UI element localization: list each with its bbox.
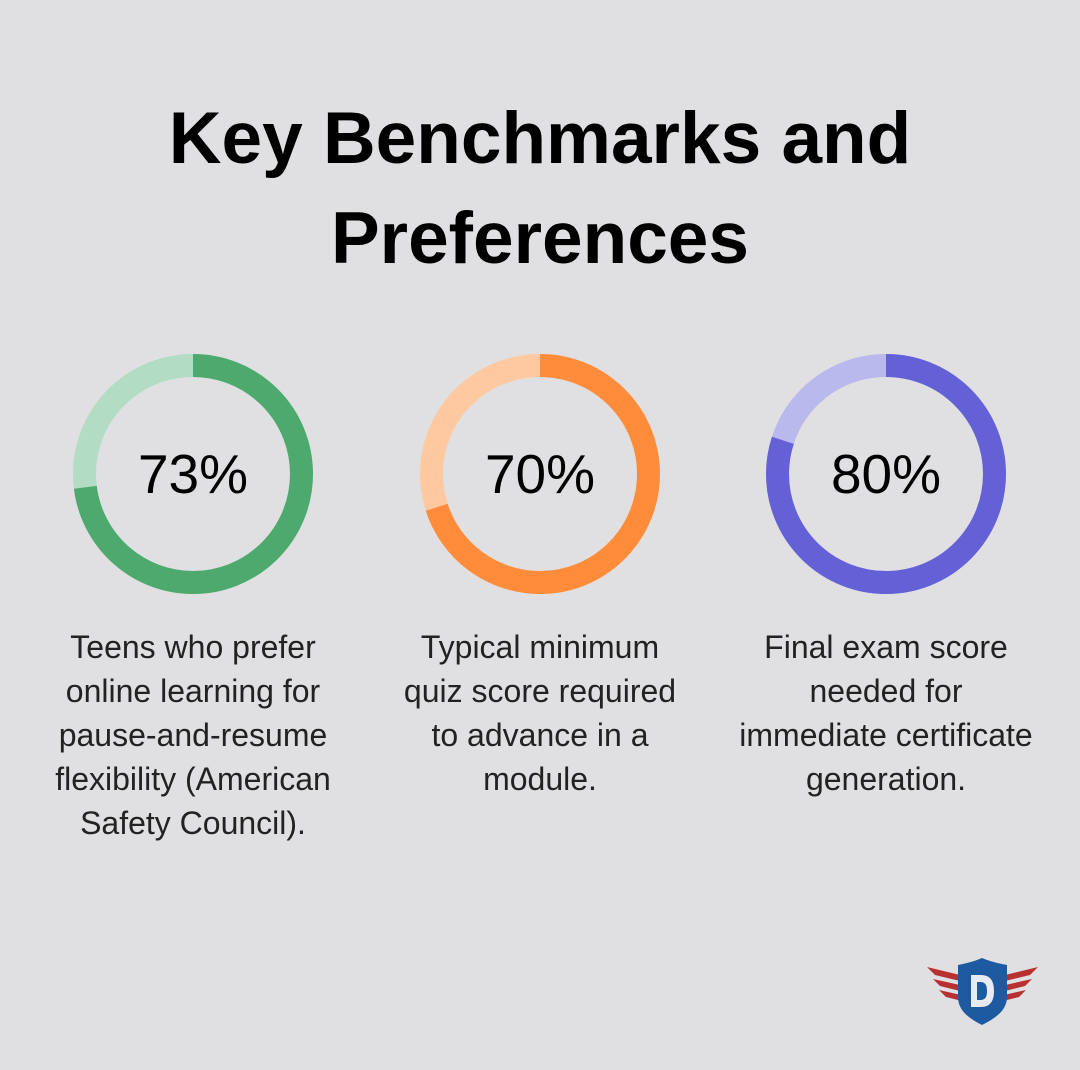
text: 73% description: Teens who prefer xyxy=(70,629,316,665)
text: 80% description: generation. xyxy=(806,761,966,797)
text: 73% description: online learning for xyxy=(66,673,320,709)
chart: 73% ring xyxy=(73,354,313,594)
text: 80% description xyxy=(739,629,1033,797)
chart: 80% ring xyxy=(766,354,1006,594)
icon: logo shield xyxy=(927,958,1038,1025)
text: 70% description: to advance in a xyxy=(431,717,649,753)
chart: 70% ring: 70% xyxy=(485,443,595,505)
title: Preferences xyxy=(331,198,749,279)
text: 70% description: Typical minimum xyxy=(421,629,659,665)
text: 80% description: Final exam score xyxy=(764,629,1008,665)
chart: 80% ring: 80% xyxy=(831,443,941,505)
text: 70% description xyxy=(404,629,676,797)
text: 70% description: quiz score required xyxy=(404,673,676,709)
title xyxy=(169,98,911,279)
chart: 70% ring xyxy=(420,354,660,594)
text: 73% description: pause-and-resume xyxy=(59,717,327,753)
text: 70% description: module. xyxy=(483,761,597,797)
text: 80% description: needed for xyxy=(809,673,962,709)
text: 80% description: immediate certificate xyxy=(739,717,1033,753)
chart: 73% ring: 73% xyxy=(138,443,248,505)
title: Key Benchmarks and xyxy=(169,98,911,179)
text: 73% description: Safety Council). xyxy=(80,805,306,841)
text: 73% description: flexibility (American xyxy=(55,761,331,797)
text: 73% description xyxy=(55,629,331,841)
